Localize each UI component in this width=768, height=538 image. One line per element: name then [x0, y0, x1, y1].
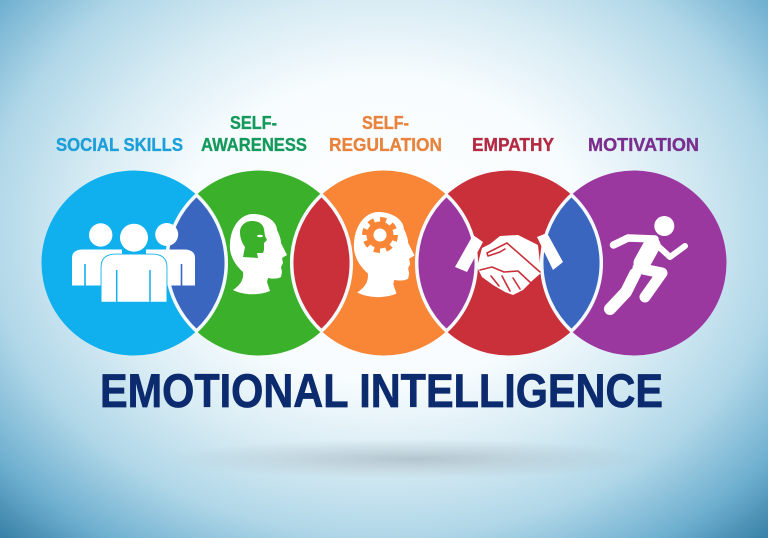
label: motivation: MOTIVATION: [588, 135, 699, 155]
icon: runner: [610, 216, 685, 309]
overlap: blue: [167, 195, 226, 331]
icon: group of people: [72, 223, 195, 302]
label: self-awareness: AWARENESS: [201, 135, 307, 155]
icon: head with gear: [354, 212, 414, 297]
thumb line: [487, 243, 540, 272]
circle: self-awareness: [166, 170, 352, 356]
circle: empathy: [416, 170, 602, 356]
floor shadow: [167, 439, 657, 479]
label: self-awareness: SELF-: [230, 113, 277, 133]
label: self-regulation: [329, 113, 442, 155]
title: EMOTIONAL INTELLIGENCE: [100, 364, 663, 417]
venn circles: [42, 170, 726, 356]
label: self-regulation: REGULATION: [329, 135, 442, 155]
label: self-awareness: [201, 113, 307, 155]
label: empathy: EMPATHY: [472, 135, 554, 155]
label: social skills: SOCIAL SKILLS: [56, 135, 183, 155]
icon: handshake: [455, 233, 563, 295]
circle: motivation: [542, 170, 726, 356]
overlap: purple: [417, 195, 476, 331]
icon: head with face: [230, 214, 287, 294]
circle: social skills: [42, 170, 226, 356]
finger outline: [480, 267, 532, 291]
circle: self-regulation: [292, 170, 476, 356]
overlap: red: [292, 195, 351, 331]
label: self-regulation: SELF-: [362, 113, 409, 133]
labels row: [56, 113, 699, 155]
overlap: blue right: [542, 195, 601, 331]
